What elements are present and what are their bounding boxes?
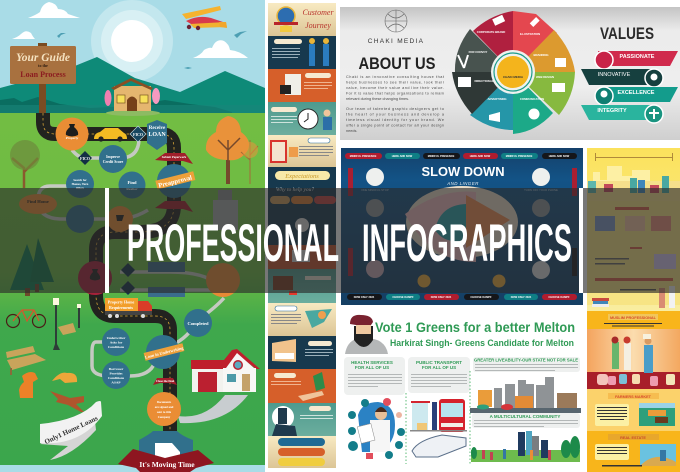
dog: orange: [19, 372, 38, 398]
milestone: purchase: Documents: [157, 400, 172, 404]
milestone: find realtor: Find: [127, 180, 137, 185]
chart: service wheel: CHAKI MEDIA: [503, 75, 524, 79]
icon: decision diamond: FICO: [133, 132, 143, 137]
section: workers: [268, 36, 336, 69]
value: innovative: [581, 69, 663, 87]
bottom pills: CHOOSE DAMPF: [392, 295, 414, 299]
banner: it's moving time: It's Moving Time: [139, 460, 195, 469]
section: payment: [268, 369, 336, 403]
milestone: property: Property: [66, 136, 79, 140]
text block: company description: Chaki is an innovative consulting house that: [346, 75, 445, 79]
milestone: preapproval: [155, 164, 195, 198]
top section: [587, 148, 680, 311]
icon: taxi car: [94, 128, 127, 142]
milestone: borrower: Provides: [110, 372, 123, 376]
tree: left brown: [10, 140, 40, 188]
sun: [91, 0, 173, 82]
top pills: HERE AND NOW: [549, 154, 570, 158]
heading: slow down: SLOW DOWN: [422, 164, 504, 179]
milestone: purchase: Company: [158, 415, 171, 419]
heading: about us: ABOUT US: [358, 55, 436, 73]
section: red: [268, 245, 336, 269]
chart: service wheel: ADVERTISING: [487, 97, 507, 101]
section: expectations: Why to help you?: [276, 187, 314, 193]
chart: service wheel: ILLUSTRATION: [520, 32, 540, 36]
milestone: borrower: Borrower: [109, 367, 124, 371]
pine trees: [10, 238, 54, 296]
panel: about us: [340, 7, 680, 140]
section: people on stage: [587, 329, 680, 389]
milestone: improve credit score: [99, 145, 127, 173]
header: Journey: [305, 21, 331, 30]
card: public transport: [408, 357, 470, 393]
avatar: candidate: [345, 315, 388, 354]
bottom pills: NOW ONLY 2024: [511, 295, 532, 299]
badge: moving van: [139, 431, 193, 458]
emoji: left: [418, 274, 430, 288]
central plate: [405, 186, 518, 262]
milestone: purchase: sent to title: [157, 410, 172, 414]
illustration: community park: [471, 431, 580, 462]
banner: find home: Find Home: [27, 199, 49, 204]
driveway: [178, 395, 248, 423]
ribbon: only 1 home loans: [40, 401, 102, 460]
dotted dividers: [406, 371, 470, 464]
milestone: improve credit score: Improve: [106, 155, 120, 159]
milestone: find realtor: [118, 172, 146, 198]
card: public transport: PUBLIC TRANSPORT: [416, 360, 462, 365]
illustration: bullet train: [412, 435, 466, 457]
background: [341, 148, 583, 305]
left white bar: [105, 188, 109, 293]
section: phone: [268, 403, 336, 436]
banner: close the deal: [153, 378, 177, 385]
milestone: borrower: ASAP: [111, 380, 121, 384]
header: Customer: [302, 8, 334, 17]
icon labels: [361, 188, 558, 192]
top pills: MINDFUL PRESENCE: [506, 154, 533, 158]
brand name: CHAKI MEDIA: [368, 38, 424, 45]
badge: receive loan: LOAN: [148, 132, 166, 138]
badge: receive loan: [147, 120, 167, 150]
text block: company description: Our team of talented graphic designers get to: [346, 107, 444, 111]
signpost: Your Guide: [16, 52, 70, 64]
mountains: [0, 57, 265, 116]
value: excellence: EXCELLENCE: [618, 90, 655, 96]
milestone: orange right: [206, 263, 240, 297]
section: checklist: [268, 135, 336, 167]
milestone: borrower: Conditions: [108, 376, 125, 380]
top pills: MINDFUL PRESENCE: [428, 154, 455, 158]
chart: service wheel: BRANDING: [533, 53, 549, 57]
milestone: choose a loan: [66, 170, 94, 198]
side tabs: [348, 168, 577, 276]
card: greater liveability: [473, 357, 580, 372]
title: professional infographics: [127, 214, 572, 273]
house: [191, 349, 260, 392]
banner: red ribbon: [155, 201, 193, 212]
bottom pills: CHOOSE DAMPF: [470, 295, 492, 299]
section: contact: [268, 436, 336, 468]
chart: service wheel: WEB DESIGN: [536, 75, 554, 79]
text block: company description: relevant during these changing times.: [346, 97, 409, 101]
milestone: completed: [184, 309, 212, 337]
card: health services: HEALTH SERVICES: [351, 360, 393, 365]
card: greater liveability: GREATER LIVEABILITY-OUR STATE NOT FOR SALE: [474, 358, 578, 362]
text block: company description: For it is value that helps organisations to remain: [346, 92, 444, 96]
logo: [385, 10, 407, 32]
section: real estate: REAL ESTATE: [620, 436, 646, 440]
section: real estate: [587, 431, 680, 472]
header: [268, 3, 336, 36]
truck: property report: [105, 298, 152, 318]
panel: customer journey: [268, 3, 336, 468]
banner: close the deal: Close the Deal: [156, 379, 174, 383]
right white bar: [579, 188, 583, 293]
value: excellence: [595, 87, 678, 105]
milestone: find realtor: Realtor: [126, 187, 138, 191]
panel: yellow cultural infographic: [587, 148, 680, 472]
text block: company description: the heart of your business and develop a: [346, 112, 445, 116]
chart: service wheel: DIRECTIONAL: [474, 79, 494, 83]
background: [340, 7, 680, 140]
bottom pills: NOW ONLY 2024: [354, 295, 375, 299]
chart: service wheel: [452, 11, 575, 134]
card: health services: FOR ALL OF US: [355, 365, 389, 370]
value: passionate: [595, 51, 678, 69]
bottom pills: [347, 294, 577, 300]
top pills: MINDFUL PRESENCE: [350, 154, 377, 158]
section: farmers market: FARMERS MARKET: [615, 395, 652, 399]
icon: birds: [57, 31, 247, 69]
panel: vote greens: [344, 315, 581, 464]
text block: company description: needs.: [346, 129, 357, 133]
milestone: underwriter: [102, 328, 130, 356]
skyline: [587, 166, 680, 201]
top pills: HERE AND NOW: [392, 154, 413, 158]
infographic body: [587, 201, 680, 305]
milestone: underwriter: Conditions: [108, 345, 125, 349]
subheading: candidate: Harkirat Singh- Greens Candidate for Melton: [390, 338, 574, 349]
subheading: AND LINGER: [446, 181, 479, 186]
illustration: city: [470, 377, 581, 417]
value: innovative: INNOVATIVE: [598, 72, 631, 78]
top pills: HERE AND NOW: [470, 154, 491, 158]
banner: preapproval: Submit Paperwork: [162, 155, 187, 159]
section: muslim businesses: MUSLIM PROFESSIONAL: [610, 316, 657, 320]
icon labels: ONE MINDFUL STOP: [361, 188, 389, 192]
card: public transport: FOR ALL OF US: [422, 365, 456, 370]
section: after the move: [268, 303, 336, 336]
signpost: Loan Process: [20, 70, 66, 79]
value: integrity: INTEGRITY: [597, 108, 627, 114]
icon labels: TURN OFF YOUR PHONE: [524, 188, 558, 192]
bottom pills: NOW ONLY 2024: [431, 295, 452, 299]
milestone: property: [56, 118, 88, 150]
tree: small orange: [241, 140, 258, 184]
section: expectations: [268, 167, 336, 269]
milestone: underwriter: Asks for: [110, 340, 123, 344]
ribbons: [148, 262, 185, 297]
section: muslim businesses: [587, 311, 680, 329]
ribbon: only 1 home loans: Only1 Home Loans: [43, 414, 99, 446]
benches: [6, 323, 76, 375]
icon: biplane: [182, 6, 227, 30]
road: [43, 113, 174, 440]
illustration: bus stop and bus: [410, 399, 467, 432]
building: [213, 190, 238, 230]
chart: service wheel: COMMUNICATION: [520, 97, 544, 101]
milestone: cart: [107, 206, 133, 232]
heading: values: VALUES: [600, 24, 654, 43]
panel: slow down: [341, 148, 583, 305]
truck: property report: Requirements: [109, 305, 133, 310]
section: clock: [268, 102, 336, 135]
signpost: [10, 43, 76, 115]
cottage: [104, 78, 160, 116]
top pills: [345, 153, 577, 159]
bottom pills: CHOOSE DAMPF: [548, 295, 570, 299]
milestone: completed: Completed: [188, 321, 209, 326]
bottom sky: [0, 465, 265, 472]
illustration: doctor: [348, 398, 405, 459]
milestone: borrower: [102, 361, 130, 389]
text block: company description: [346, 75, 445, 133]
grass: [0, 113, 265, 466]
tree: orange: [206, 116, 249, 184]
icon: diamonds: [121, 263, 135, 295]
milestone: preapproval: Preapproval: [158, 174, 193, 190]
text block: company description: offer a single point of contact for all your design: [346, 124, 444, 128]
milestone: loan in underwriting: Loan in Underwriting: [144, 345, 185, 360]
text block: company description: value, become their value and live their value.: [346, 86, 444, 90]
milestone: underwriter: Underwriter: [107, 336, 126, 340]
milestone: choose a loan: Homes, Turn: [72, 182, 89, 186]
banner: it's moving time: [118, 449, 214, 472]
icon: books and figures: [592, 286, 675, 308]
connector paths: [38, 140, 224, 376]
value: passionate: PASSIONATE: [620, 54, 655, 60]
section: expectations: Expectations: [284, 173, 319, 180]
text block: company description: helps businesses to see their value, look their: [346, 80, 445, 84]
heading: vote 1 greens: Vote 1 Greens for a better Melton: [375, 319, 575, 335]
milestone: purchase: [147, 392, 181, 426]
lamp posts: [53, 298, 81, 350]
icon: decision diamond: [130, 126, 146, 142]
section: orange: [268, 69, 336, 102]
banner: find home: [19, 194, 57, 214]
section: bedroom: [268, 336, 336, 369]
signpost: to the: [38, 63, 48, 68]
dog: sleeping: [52, 373, 77, 383]
milestone: choose a loan: Search for: [73, 178, 87, 182]
icon: bicycle: [6, 310, 46, 328]
milestone: choose a loan: Offers: [76, 186, 85, 190]
section: farmers market: [587, 389, 680, 431]
emoji: right: [492, 274, 506, 288]
milestone: offers: [66, 205, 94, 233]
text block: company description: timeless visual identity for your brand. We: [346, 118, 444, 122]
card: health services: [344, 357, 405, 395]
card: multicultural: [472, 413, 580, 428]
airplane dog: [50, 391, 84, 412]
title word: professional: PROFESSIONAL: [127, 214, 339, 273]
banner: preapproval: [155, 153, 193, 164]
chart: service wheel: FOR CONVOY: [469, 50, 488, 54]
badge: receive loan: Receive: [149, 126, 166, 131]
milestone: loan in underwriting: [144, 335, 185, 369]
milestone: application: [78, 261, 112, 295]
value: integrity: [581, 105, 663, 123]
milestone: purchase: are signed and: [155, 405, 174, 409]
milestone: improve credit score: Credit Score: [103, 160, 124, 164]
timeline: [595, 153, 673, 161]
section: toolbox: [268, 269, 336, 303]
sky: [0, 0, 265, 113]
icon: decision diamond: FICO: [80, 156, 90, 161]
panel: loan process guide: [0, 0, 265, 472]
chart: service wheel: CORPORATE BRAND: [477, 30, 505, 34]
dark title band: [0, 188, 680, 293]
icons: circles: [366, 168, 550, 279]
card: multicultural: A MULTICULTURAL COMMUNITY: [490, 414, 560, 419]
icon: decision diamond: [78, 151, 92, 165]
truck: property report: Property Home: [108, 300, 134, 304]
icon: clouds: [12, 2, 248, 58]
